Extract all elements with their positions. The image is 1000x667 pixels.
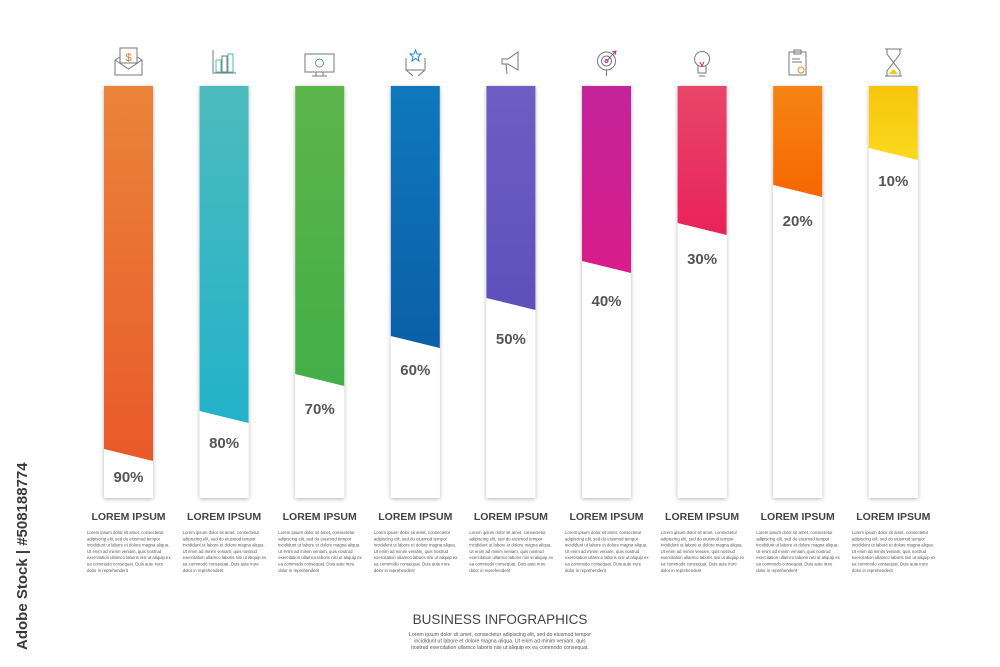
text block 3: LOREM IPSUM [283, 511, 357, 523]
text block 5 [469, 511, 554, 573]
text block 3: ea commodo consequat. Duis aute irure [278, 562, 355, 566]
text block 6: ea commodo consequat. Duis aute irure [565, 562, 642, 566]
text blocks [87, 511, 936, 573]
text block 8: Lorem ipsum dolor sit amet, consectetur [756, 530, 833, 535]
footer text: incididunt ut labore et dolore magna aliqua. Ut enim ad minim veniam, quis [414, 638, 586, 644]
column 3: 70% [295, 86, 344, 498]
text block 4: incididunt ut labore et dolore magna aliqua. [374, 543, 456, 548]
text block 2: Ut enim ad minim veniam, quis nostrud [183, 549, 257, 554]
text block 1: incididunt ut labore et dolore magna aliqua. [87, 543, 169, 548]
column 5: 50% [486, 86, 535, 498]
footer text: Lorem ipsum dolor sit amet, consectetur adipiscing elit, sed do eiusmod tempor [409, 632, 591, 638]
text block 1: ea commodo consequat. Duis aute irure [87, 562, 164, 566]
column 1: 90% [104, 86, 153, 498]
text block 5: dolor in reprehenderit [469, 568, 511, 573]
text block 5: adipiscing elit, sed do eiusmod tempor [469, 536, 543, 541]
text block 3 [278, 511, 363, 573]
column 5: 50%: 50% [496, 331, 526, 348]
text block 8 [756, 511, 841, 573]
text block 6: adipiscing elit, sed do eiusmod tempor [565, 536, 639, 541]
icon: monitor with money bag [305, 54, 334, 76]
text block 4: Ut enim ad minim veniam, quis nostrud [374, 549, 449, 554]
column 9: 10%: 10% [878, 173, 908, 190]
watermark: vertical stock id: Adobe Stock | #508188774 [14, 462, 31, 650]
text block 5: LOREM IPSUM [474, 511, 548, 523]
column 2: 80%: 80% [209, 435, 239, 452]
text block 2: ea commodo consequat. Duis aute irure [183, 562, 259, 566]
column 7: 30% [678, 86, 727, 498]
footer text [409, 632, 591, 651]
column 3: 70%: 70% [305, 401, 335, 418]
text block 4: Lorem ipsum dolor sit amet, consectetur [374, 530, 451, 535]
text block 1 [87, 511, 171, 573]
text block 1: LOREM IPSUM [91, 511, 166, 523]
text block 9: exercitation ullamco laboris nisi ut aliquip ex [852, 555, 936, 560]
text block 4: dolor in reprehenderit [374, 568, 415, 573]
text block 9: ea commodo consequat. Duis aute irure [852, 562, 929, 566]
footer title [409, 612, 591, 651]
text block 4 [374, 511, 458, 573]
text block 7: ea commodo consequat. Duis aute irure [661, 562, 737, 566]
text block 7: incididunt ut labore et dolore magna aliqua. [661, 543, 743, 548]
text block 1: Lorem ipsum dolor sit amet, consectetur [87, 530, 164, 535]
text block 2 [183, 511, 267, 573]
column 7: 30%: 30% [687, 251, 717, 268]
text block 7 [661, 511, 745, 573]
text block 1: adipiscing elit, sed do eiusmod tempor [87, 536, 161, 541]
text block 9: incididunt ut labore et dolore magna aliqua. [852, 543, 934, 548]
text block 8: adipiscing elit, sed do eiusmod tempor [756, 536, 830, 541]
text block 7: LOREM IPSUM [665, 511, 739, 523]
text block 9: LOREM IPSUM [856, 511, 931, 523]
text block 9: adipiscing elit, sed do eiusmod tempor [852, 536, 925, 541]
text block 8: dolor in reprehenderit [756, 568, 798, 573]
column 9: 10% [869, 86, 918, 498]
text block 7: dolor in reprehenderit [661, 568, 702, 573]
icon: envelope with dollar [115, 48, 142, 75]
text block 5: Ut enim ad minim veniam, quis nostrud [469, 549, 544, 554]
text block 3: dolor in reprehenderit [278, 568, 320, 573]
column 1: 90%: 90% [113, 469, 144, 486]
text block 9 [852, 511, 936, 573]
column 8: 20%: 20% [783, 213, 813, 230]
text block 4: LOREM IPSUM [378, 511, 453, 523]
icon: hands with star [406, 50, 425, 76]
footer title: BUSINESS INFOGRAPHICS [413, 612, 587, 627]
text block 4: ea commodo consequat. Duis aute irure [374, 562, 451, 566]
icon: clipboard [789, 50, 806, 75]
text block 5: ea commodo consequat. Duis aute irure [469, 562, 546, 566]
text block 6: dolor in reprehenderit [565, 568, 607, 573]
text block 2: dolor in reprehenderit [183, 568, 224, 573]
text block 2: exercitation ullamco laboris nisi ut aliquip ex [183, 555, 267, 560]
text block 9: dolor in reprehenderit [852, 568, 893, 573]
text block 7: adipiscing elit, sed do eiusmod tempor [661, 536, 734, 541]
text block 6: incididunt ut labore et dolore magna aliqua. [565, 543, 647, 548]
text block 3: exercitation ullamco laboris nisi ut aliquip ex [278, 555, 363, 560]
text block 6 [565, 511, 649, 573]
icon: hourglass [885, 49, 902, 76]
text block 2: adipiscing elit, sed do eiusmod tempor [183, 536, 256, 541]
column 8: 20% [773, 86, 822, 498]
icon: bar chart [213, 50, 236, 73]
text block 6: Lorem ipsum dolor sit amet, consectetur [565, 530, 642, 535]
text block 7: Ut enim ad minim veniam, quis nostrud [661, 549, 735, 554]
text block 1: Ut enim ad minim veniam, quis nostrud [87, 549, 162, 554]
column 6: 40%: 40% [591, 293, 622, 310]
text block 2: Lorem ipsum dolor sit amet, consectetur [183, 530, 260, 535]
text block 8: incididunt ut labore et dolore magna aliqua. [756, 543, 838, 548]
column 2: 80% [200, 86, 249, 498]
text block 6: exercitation ullamco laboris nisi ut aliquip ex [565, 555, 649, 560]
text block 6: LOREM IPSUM [569, 511, 644, 523]
text block 3: adipiscing elit, sed do eiusmod tempor [278, 536, 352, 541]
text block 8: Ut enim ad minim veniam, quis nostrud [756, 549, 831, 554]
column 6: 40% [582, 86, 631, 498]
text block 5: exercitation ullamco laboris nisi ut aliquip ex [469, 555, 554, 560]
text block 1: exercitation ullamco laboris nisi ut aliquip ex [87, 555, 171, 560]
icon: megaphone [502, 52, 518, 74]
text block 4: adipiscing elit, sed do eiusmod tempor [374, 536, 447, 541]
text block 5: incididunt ut labore et dolore magna aliqua. [469, 543, 552, 548]
column 4: 60%: 60% [400, 362, 430, 379]
icon: target [598, 51, 616, 76]
text block 8: exercitation ullamco laboris nisi ut aliquip ex [756, 555, 841, 560]
icon: envelope with dollar: $ [125, 52, 132, 64]
text block 3: Ut enim ad minim veniam, quis nostrud [278, 549, 353, 554]
text block 6: Ut enim ad minim veniam, quis nostrud [565, 549, 640, 554]
text block 2: LOREM IPSUM [187, 511, 261, 523]
text block 8: LOREM IPSUM [761, 511, 835, 523]
footer text: nostrud exercitation ullamco laboris nisi ut aliquip ex ea commodo consequat. [411, 645, 589, 651]
text block 8: ea commodo consequat. Duis aute irure [756, 562, 833, 566]
text block 5: Lorem ipsum dolor sit amet, consectetur [469, 530, 546, 535]
text block 4: exercitation ullamco laboris nisi ut aliquip ex [374, 555, 458, 560]
text block 7: Lorem ipsum dolor sit amet, consectetur [661, 530, 738, 535]
text block 3: incididunt ut labore et dolore magna aliqua. [278, 543, 360, 548]
text block 1: dolor in reprehenderit [87, 568, 129, 573]
text block 2: incididunt ut labore et dolore magna aliqua. [183, 543, 265, 548]
text block 9: Ut enim ad minim veniam, quis nostrud [852, 549, 927, 554]
icon: light bulb [695, 52, 710, 76]
text block 9: Lorem ipsum dolor sit amet, consectetur [852, 530, 929, 535]
text block 3: Lorem ipsum dolor sit amet, consectetur [278, 530, 355, 535]
text block 7: exercitation ullamco laboris nisi ut aliquip ex [661, 555, 745, 560]
column 4: 60% [391, 86, 440, 498]
